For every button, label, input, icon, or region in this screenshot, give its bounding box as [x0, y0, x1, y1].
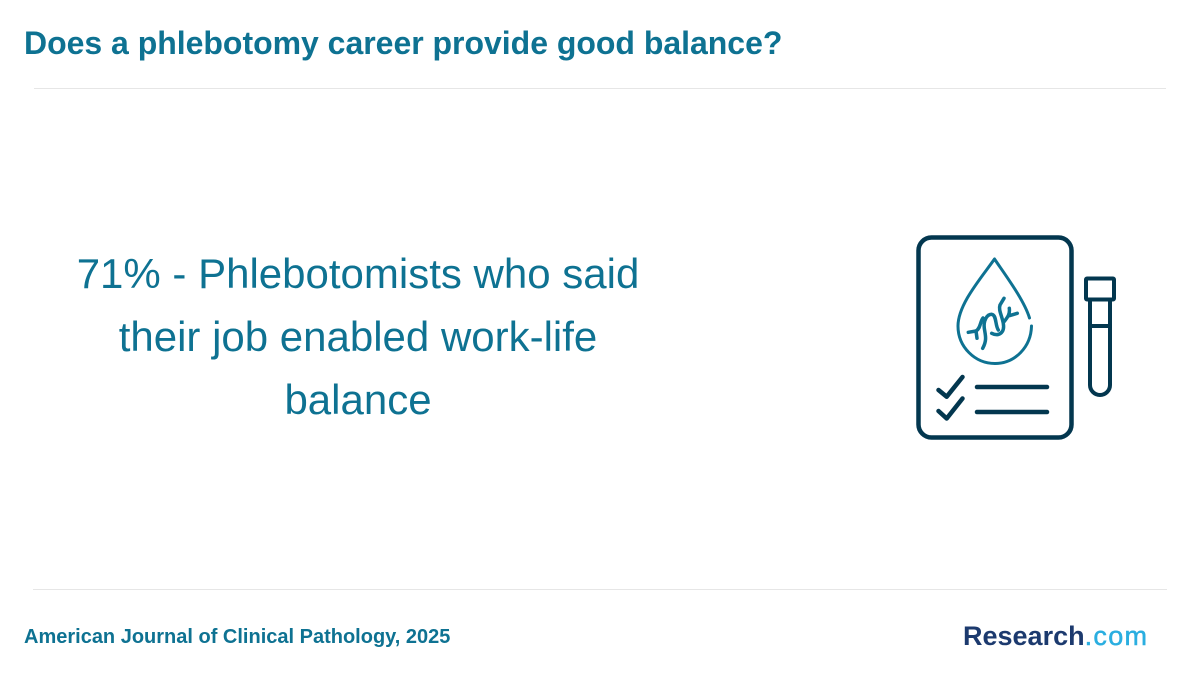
source citation: American Journal of Clinical Pathology, 2025 — [24, 626, 450, 648]
icon: second check mark — [938, 398, 962, 418]
title: Does a phlebotomy career provide good balance? — [24, 25, 782, 61]
icon: DNA helix — [968, 298, 1017, 348]
icon: second text line — [977, 410, 1047, 414]
icon: test tube — [1086, 278, 1114, 395]
icon: report page — [918, 238, 1072, 438]
icon: first check mark — [938, 377, 962, 397]
main statistic text: their job enabled work-life — [119, 313, 597, 360]
icon: lab report with blood drop and test tube — [916, 235, 1116, 440]
main statistic text: balance — [284, 376, 432, 423]
logo: Research.com: Research.com — [963, 621, 1148, 651]
main statistic text — [77, 250, 639, 423]
icon: first text line — [977, 385, 1047, 389]
main statistic text: 71% - Phlebotomists who said — [77, 250, 639, 297]
icon: blood drop — [958, 259, 1032, 364]
